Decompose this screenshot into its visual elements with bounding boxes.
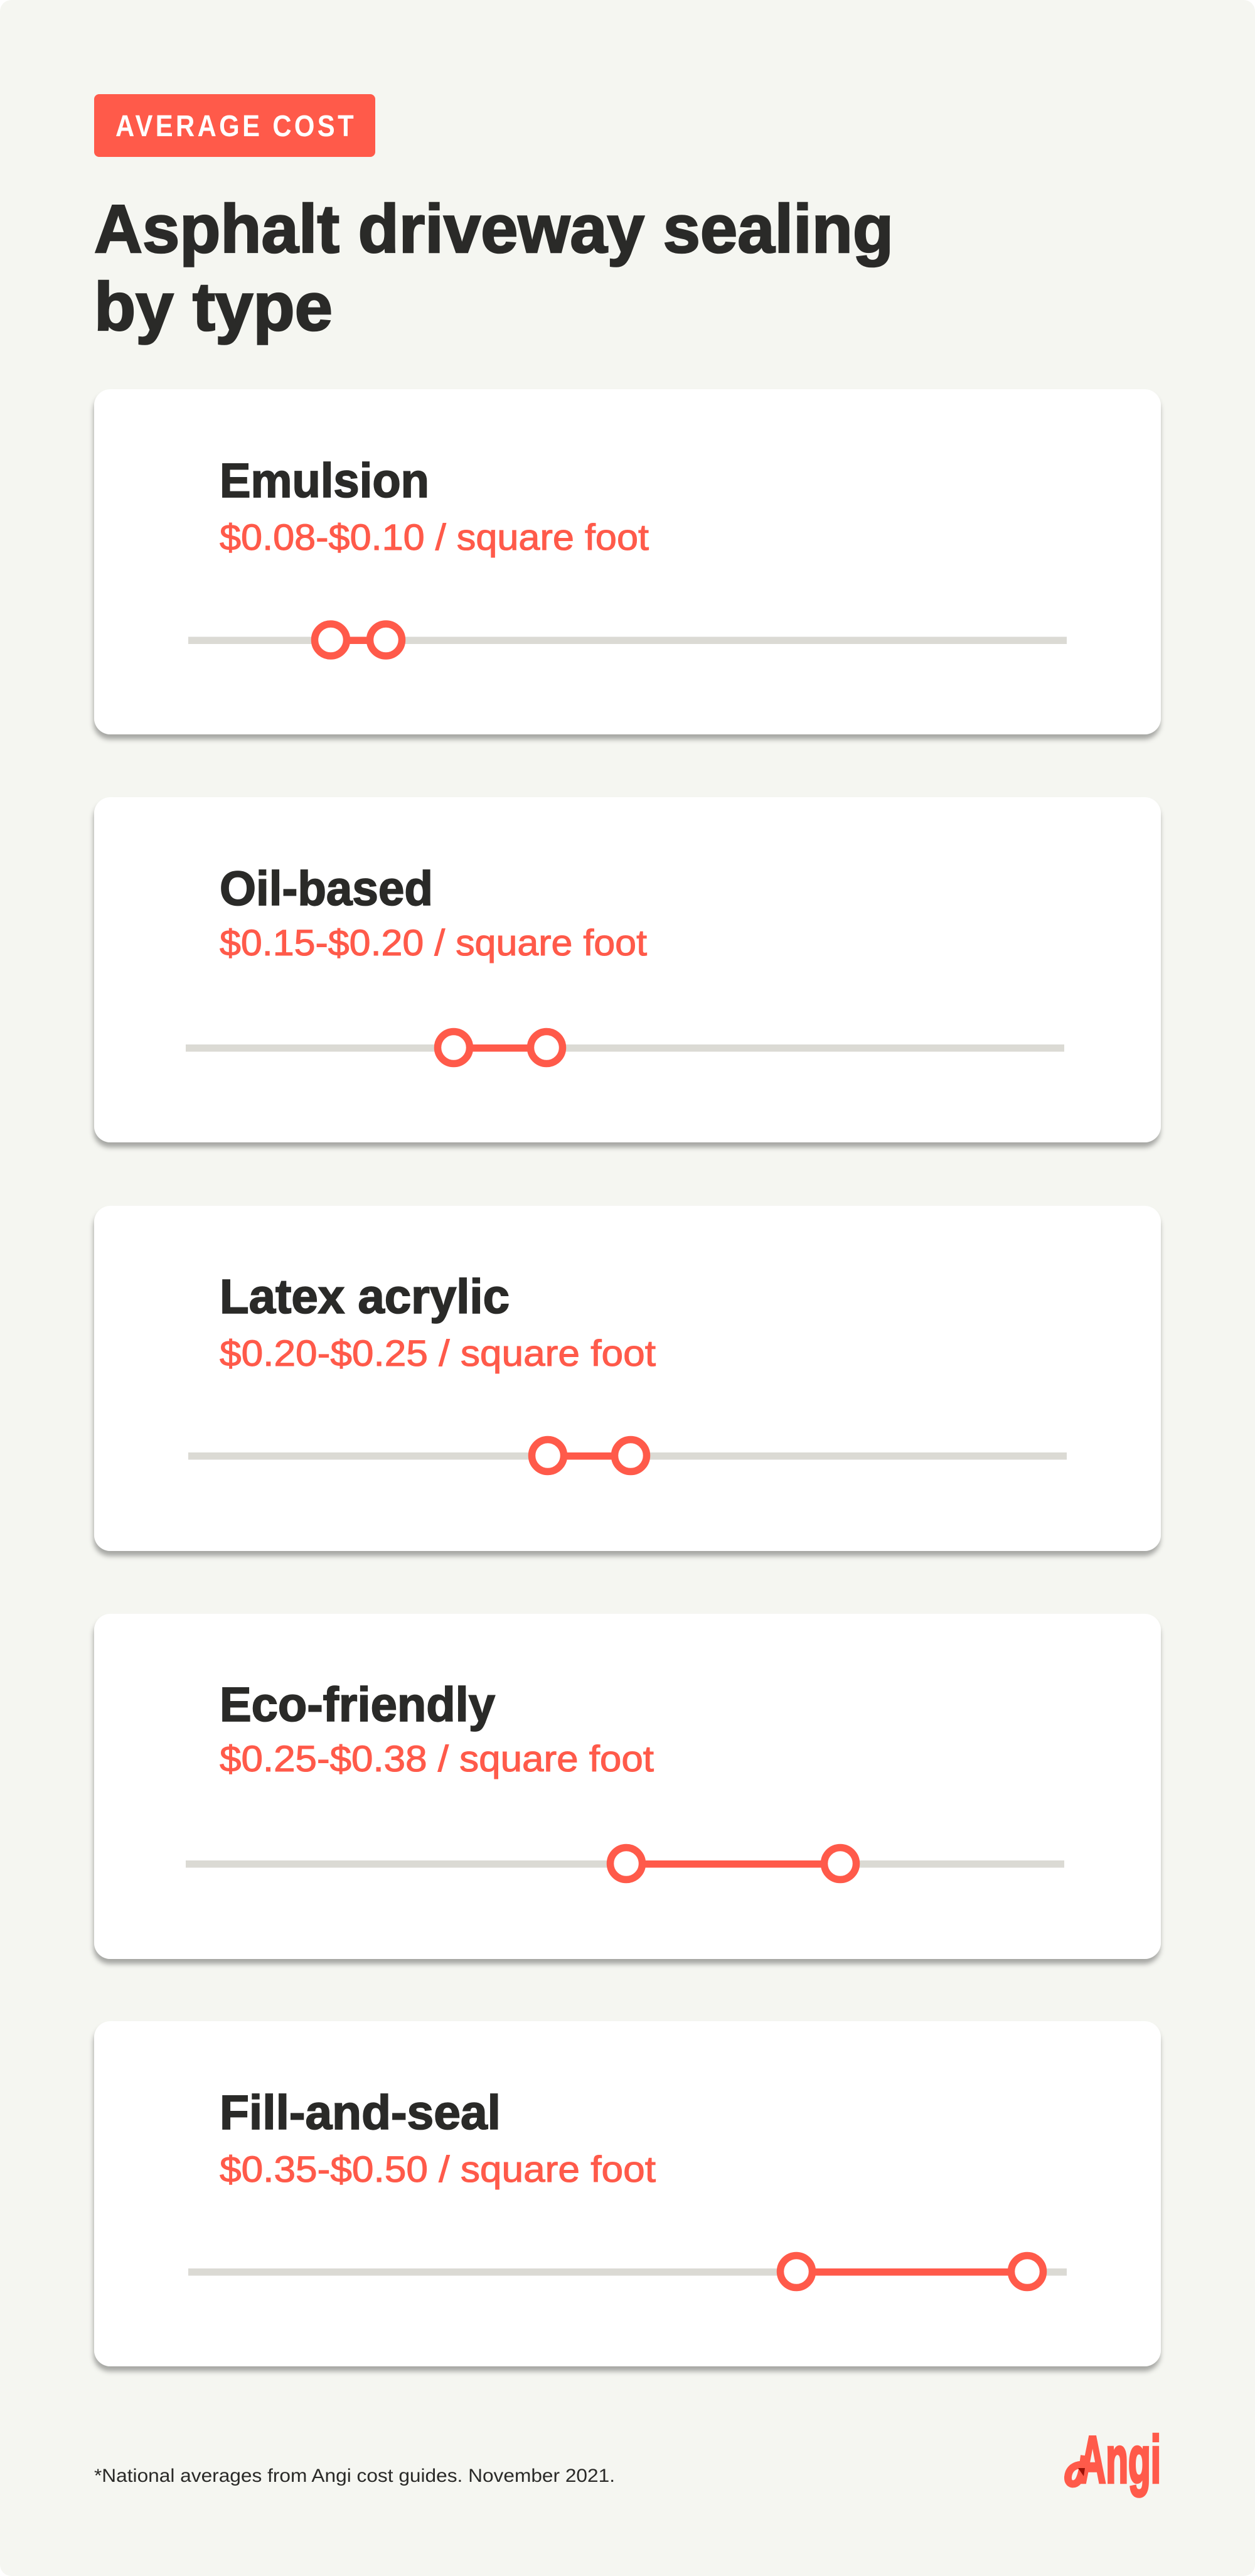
range slider: latex acrylic <box>188 1440 1067 1471</box>
logo: Angi: Angi <box>1079 2423 1161 2497</box>
price: latex acrylic: $0.20-$0.25 / square foot <box>220 1333 656 1374</box>
price: emulsion: $0.08-$0.10 / square foot <box>220 517 649 558</box>
price: fill-and-seal: $0.35-$0.50 / square foot <box>220 2149 656 2190</box>
panel: latex acrylic <box>94 1206 1161 1551</box>
price: eco-friendly: $0.25-$0.38 / square foot <box>220 1739 654 1779</box>
range slider: oil-based <box>186 1032 1064 1063</box>
panel: emulsion <box>94 389 1161 734</box>
panel: eco-friendly <box>94 1614 1161 1959</box>
badge: average cost <box>94 94 375 157</box>
footnote: *National averages from Angi cost guides. November 2021. <box>94 2466 615 2486</box>
heading: eco-friendly: Eco-friendly <box>220 1678 495 1732</box>
heading: fill-and-seal: Fill-and-seal <box>220 2086 501 2140</box>
heading: emulsion: Emulsion <box>220 454 429 508</box>
heading: oil-based: Oil-based <box>220 862 433 916</box>
price: oil-based: $0.15-$0.20 / square foot <box>220 923 647 963</box>
logo: Angi <box>1068 2423 1161 2497</box>
title <box>94 191 894 345</box>
title: by type <box>94 269 333 345</box>
range slider: eco-friendly <box>186 1848 1064 1879</box>
title: Asphalt driveway sealing <box>94 191 894 267</box>
range slider: emulsion <box>188 624 1067 656</box>
range slider: fill-and-seal <box>188 2256 1067 2287</box>
panel: fill-and-seal <box>94 2021 1161 2366</box>
badge: average cost: AVERAGE COST <box>115 110 356 143</box>
panel: oil-based <box>94 797 1161 1142</box>
heading: latex acrylic: Latex acrylic <box>220 1270 510 1324</box>
